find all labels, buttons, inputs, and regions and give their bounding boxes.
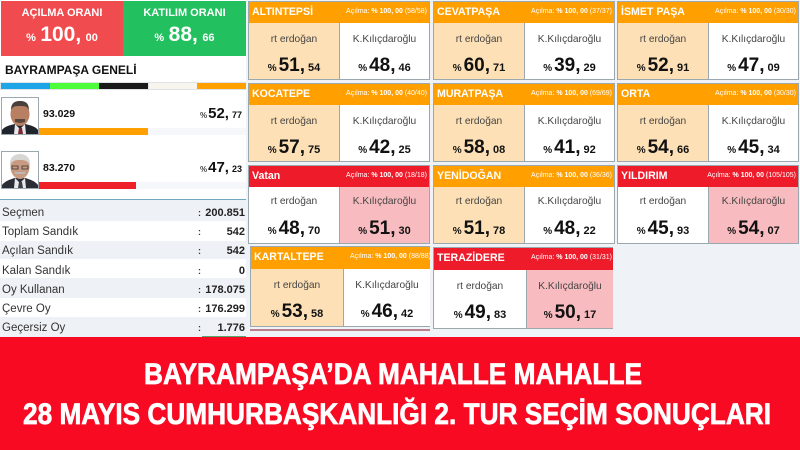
card: Yıldırım (617, 165, 799, 244)
header: KOCATEPE (252, 88, 310, 100)
stats table: : (198, 266, 201, 276)
card: Kartaltepe (250, 246, 430, 327)
stats table: Oy Kullanan (2, 284, 65, 296)
green accent line (202, 336, 246, 337)
cell: Kılıçdaroğlu (709, 187, 798, 243)
header: YENİDOĞAN (437, 170, 501, 182)
card: Terazidere (433, 247, 613, 329)
cell: Erdoğan: %52, 91 (637, 55, 689, 76)
cell: Erdoğan (249, 23, 340, 79)
cell: Kılıçdaroğlu: K.Kılıçdaroğlu (538, 196, 601, 207)
cell: Kılıçdaroğlu: K.Kılıçdaroğlu (538, 34, 601, 45)
card: Muratpaşa (433, 83, 615, 162)
header (434, 166, 614, 187)
stats table: Açılan Sandık (2, 245, 73, 257)
cell: Erdoğan (249, 187, 340, 243)
cell: Erdoğan: rt erdoğan (271, 34, 317, 45)
banner: headline (0, 337, 800, 450)
header: Açılma: % 100, 00 (18/18) (346, 172, 427, 179)
color strip (0, 82, 246, 90)
cell: Kılıçdaroğlu: %45, 34 (727, 137, 780, 158)
stat: açılma oranı: % 100, 00 (26, 23, 98, 46)
candidate row: Erdoğan (1, 97, 246, 135)
cell: Erdoğan: rt erdoğan (640, 196, 686, 207)
header: Açılma: % 100, 00 (36/36) (531, 172, 612, 179)
stats table: Kalan Sandık (2, 265, 70, 277)
cell: Kılıçdaroğlu: K.Kılıçdaroğlu (353, 116, 416, 127)
header: ORTA (621, 88, 650, 100)
header: İSMET PAŞA (621, 6, 685, 18)
cell: Erdoğan (434, 270, 527, 328)
cell: Kılıçdaroğlu: K.Kılıçdaroğlu (722, 116, 785, 127)
cell: Kılıçdaroğlu: K.Kılıçdaroğlu (722, 196, 785, 207)
header: Açılma: % 100, 00 (58/58) (346, 8, 427, 15)
stats table: 542 (227, 226, 245, 238)
header (434, 84, 614, 105)
cell: Kılıçdaroğlu (538, 116, 601, 158)
cell: Erdoğan: rt erdoğan (271, 196, 317, 207)
cell: Erdoğan (618, 187, 709, 243)
cell: Kılıçdaroğlu: K.Kılıçdaroğlu (538, 281, 602, 292)
cell: Erdoğan: rt erdoğan (274, 280, 320, 291)
cell: Kılıçdaroğlu (538, 196, 601, 239)
stats table: 178.075 (205, 284, 245, 296)
cell: Erdoğan (434, 23, 525, 79)
cell: Kılıçdaroğlu: %50, 17 (544, 302, 596, 323)
card: Yenidoğan (433, 165, 615, 244)
header: TERAZİDERE (437, 252, 505, 264)
stats table: : (198, 285, 201, 295)
header (618, 166, 798, 187)
cell: Kılıçdaroğlu: %48, 22 (543, 218, 596, 239)
cell: Erdoğan: %53, 58 (271, 301, 323, 322)
panel: summary sidebar background (0, 0, 246, 200)
stats table: : (198, 246, 201, 256)
cell: Kılıçdaroğlu: %42, 25 (358, 137, 411, 158)
cell: Erdoğan: %49, 83 (454, 302, 506, 323)
cell: Kılıçdaroğlu (527, 270, 613, 328)
header (618, 2, 798, 23)
cell: Kılıçdaroğlu: %46, 42 (361, 301, 413, 322)
cell: Kılıçdaroğlu (722, 116, 785, 158)
cell: Kılıçdaroğlu: %47, 09 (727, 55, 780, 76)
bar: Erdoğan (39, 128, 246, 135)
icon: portrait 2 (1, 151, 39, 189)
cell: Erdoğan (434, 187, 525, 243)
stats table: Toplam Sandık (2, 226, 78, 238)
cell: Kılıçdaroğlu (353, 34, 416, 76)
stat: katılım oranı: % 88, 66 (154, 23, 215, 46)
stats table: 176.299 (205, 303, 245, 315)
cell: Kılıçdaroğlu (340, 187, 429, 243)
cell: Kılıçdaroğlu: %41, 92 (543, 137, 596, 158)
stats table: Çevre Oy (2, 303, 51, 315)
cell: Kılıçdaroğlu: K.Kılıçdaroğlu (353, 196, 416, 207)
header (618, 84, 798, 105)
header: Açılma: % 100, 00 (37/37) (531, 8, 612, 15)
header: YILDIRIM (621, 170, 668, 182)
icon: portrait 1 (1, 97, 39, 135)
header: Açılma: % 100, 00 (88/88) (350, 253, 430, 260)
stat: açılma oranı: AÇILMA ORANI (22, 7, 102, 19)
card: Kocatepe (248, 83, 430, 162)
header: ALTINTEPSİ (252, 6, 313, 18)
cell: Kılıçdaroğlu (353, 116, 416, 158)
card: Vatan (248, 165, 430, 244)
cell: Erdoğan: %60, 71 (453, 55, 505, 76)
vote count: 83.270 (43, 162, 75, 174)
stat: katılım oranı: KATILIM ORANI (143, 7, 226, 19)
header (434, 2, 614, 23)
header: Açılma: % 100, 00 (105/105) (707, 172, 796, 179)
cell: Erdoğan: rt erdoğan (456, 34, 502, 45)
vote share: %52, 77 (200, 105, 242, 122)
stats table: Geçersiz Oy (2, 322, 65, 334)
vote share: %47, 23 (200, 159, 242, 176)
candidate row: Kılıçdaroğlu (1, 151, 246, 189)
header (249, 166, 429, 187)
card: Orta (617, 83, 799, 162)
cell: Kılıçdaroğlu: K.Kılıçdaroğlu (538, 116, 601, 127)
stats table: Seçmen (2, 207, 44, 219)
stats table: 1.776 (217, 322, 245, 334)
stat: açılma oranı (1, 1, 123, 56)
cell: Erdoğan: rt erdoğan (457, 281, 503, 292)
cell: Erdoğan: rt erdoğan (456, 116, 502, 127)
header (251, 247, 430, 269)
cell: Erdoğan (249, 105, 340, 161)
stats table: : (198, 304, 201, 314)
header: Açılma: % 100, 00 (31/31) (531, 254, 612, 261)
header: Açılma: % 100, 00 (30/30) (715, 8, 796, 15)
stats table: : (198, 323, 201, 333)
card: İsmet Paşa (617, 1, 799, 80)
cell: Erdoğan: %51, 54 (268, 55, 320, 76)
card: Cevatpaşa (433, 1, 615, 80)
stats table: 542 (227, 245, 245, 257)
heading: Bayrampaşa geneli: BAYRAMPAŞA GENELİ (5, 63, 137, 77)
header: CEVATPAŞA (437, 6, 500, 18)
cell: Erdoğan: %45, 93 (637, 218, 689, 239)
banner: headline: BAYRAMPAŞA’DA MAHALLE MAHALLE (144, 358, 642, 391)
header: MURATPAŞA (437, 88, 503, 100)
cell: Erdoğan: %54, 66 (637, 137, 689, 158)
stat: katılım oranı (123, 1, 246, 56)
header (434, 248, 613, 270)
cell: Erdoğan: %51, 78 (453, 218, 505, 239)
cell: Kılıçdaroğlu (355, 280, 419, 322)
stats table: 0 (239, 265, 245, 277)
cell: Erdoğan: %57, 75 (268, 137, 320, 158)
cell: Kılıçdaroğlu (538, 34, 601, 76)
cell: Erdoğan: %48, 70 (268, 218, 320, 239)
cell: Kılıçdaroğlu: K.Kılıçdaroğlu (722, 34, 785, 45)
stats table (0, 199, 246, 337)
header: Açılma: % 100, 00 (69/69) (531, 90, 612, 97)
cell: Erdoğan (618, 105, 709, 161)
vote count: 93.029 (43, 108, 75, 120)
stats table: : (198, 227, 201, 237)
cell: Kılıçdaroğlu (722, 34, 785, 76)
cell: Erdoğan: rt erdoğan (640, 34, 686, 45)
cell: Kılıçdaroğlu: %48, 46 (358, 55, 411, 76)
cell: Kılıçdaroğlu: %39, 29 (543, 55, 596, 76)
cell: Erdoğan: rt erdoğan (640, 116, 686, 127)
cell: Kılıçdaroğlu: %54, 07 (727, 218, 780, 239)
cell: Erdoğan: rt erdoğan (271, 116, 317, 127)
bar: Kılıçdaroğlu (39, 182, 246, 189)
cell: Kılıçdaroğlu: %51, 30 (358, 218, 411, 239)
cell: Erdoğan (618, 23, 709, 79)
cell: Kılıçdaroğlu: K.Kılıçdaroğlu (355, 280, 419, 291)
cell: Erdoğan: %58, 08 (453, 137, 505, 158)
header: Açılma: % 100, 00 (30/30) (715, 90, 796, 97)
divider under Kartaltepe (250, 329, 430, 331)
header (249, 2, 429, 23)
stats table: 200.851 (205, 207, 245, 219)
header (249, 84, 429, 105)
header: KARTALTEPE (254, 251, 324, 263)
stats table: : (198, 208, 201, 218)
header: Açılma: % 100, 00 (40/40) (346, 90, 427, 97)
cell: Erdoğan (251, 269, 344, 326)
cell: Kılıçdaroğlu: K.Kılıçdaroğlu (353, 34, 416, 45)
cell: Erdoğan: rt erdoğan (456, 196, 502, 207)
card: Altıntepsi (248, 1, 430, 80)
cell: Erdoğan (434, 105, 525, 161)
header: Vatan (252, 170, 280, 182)
